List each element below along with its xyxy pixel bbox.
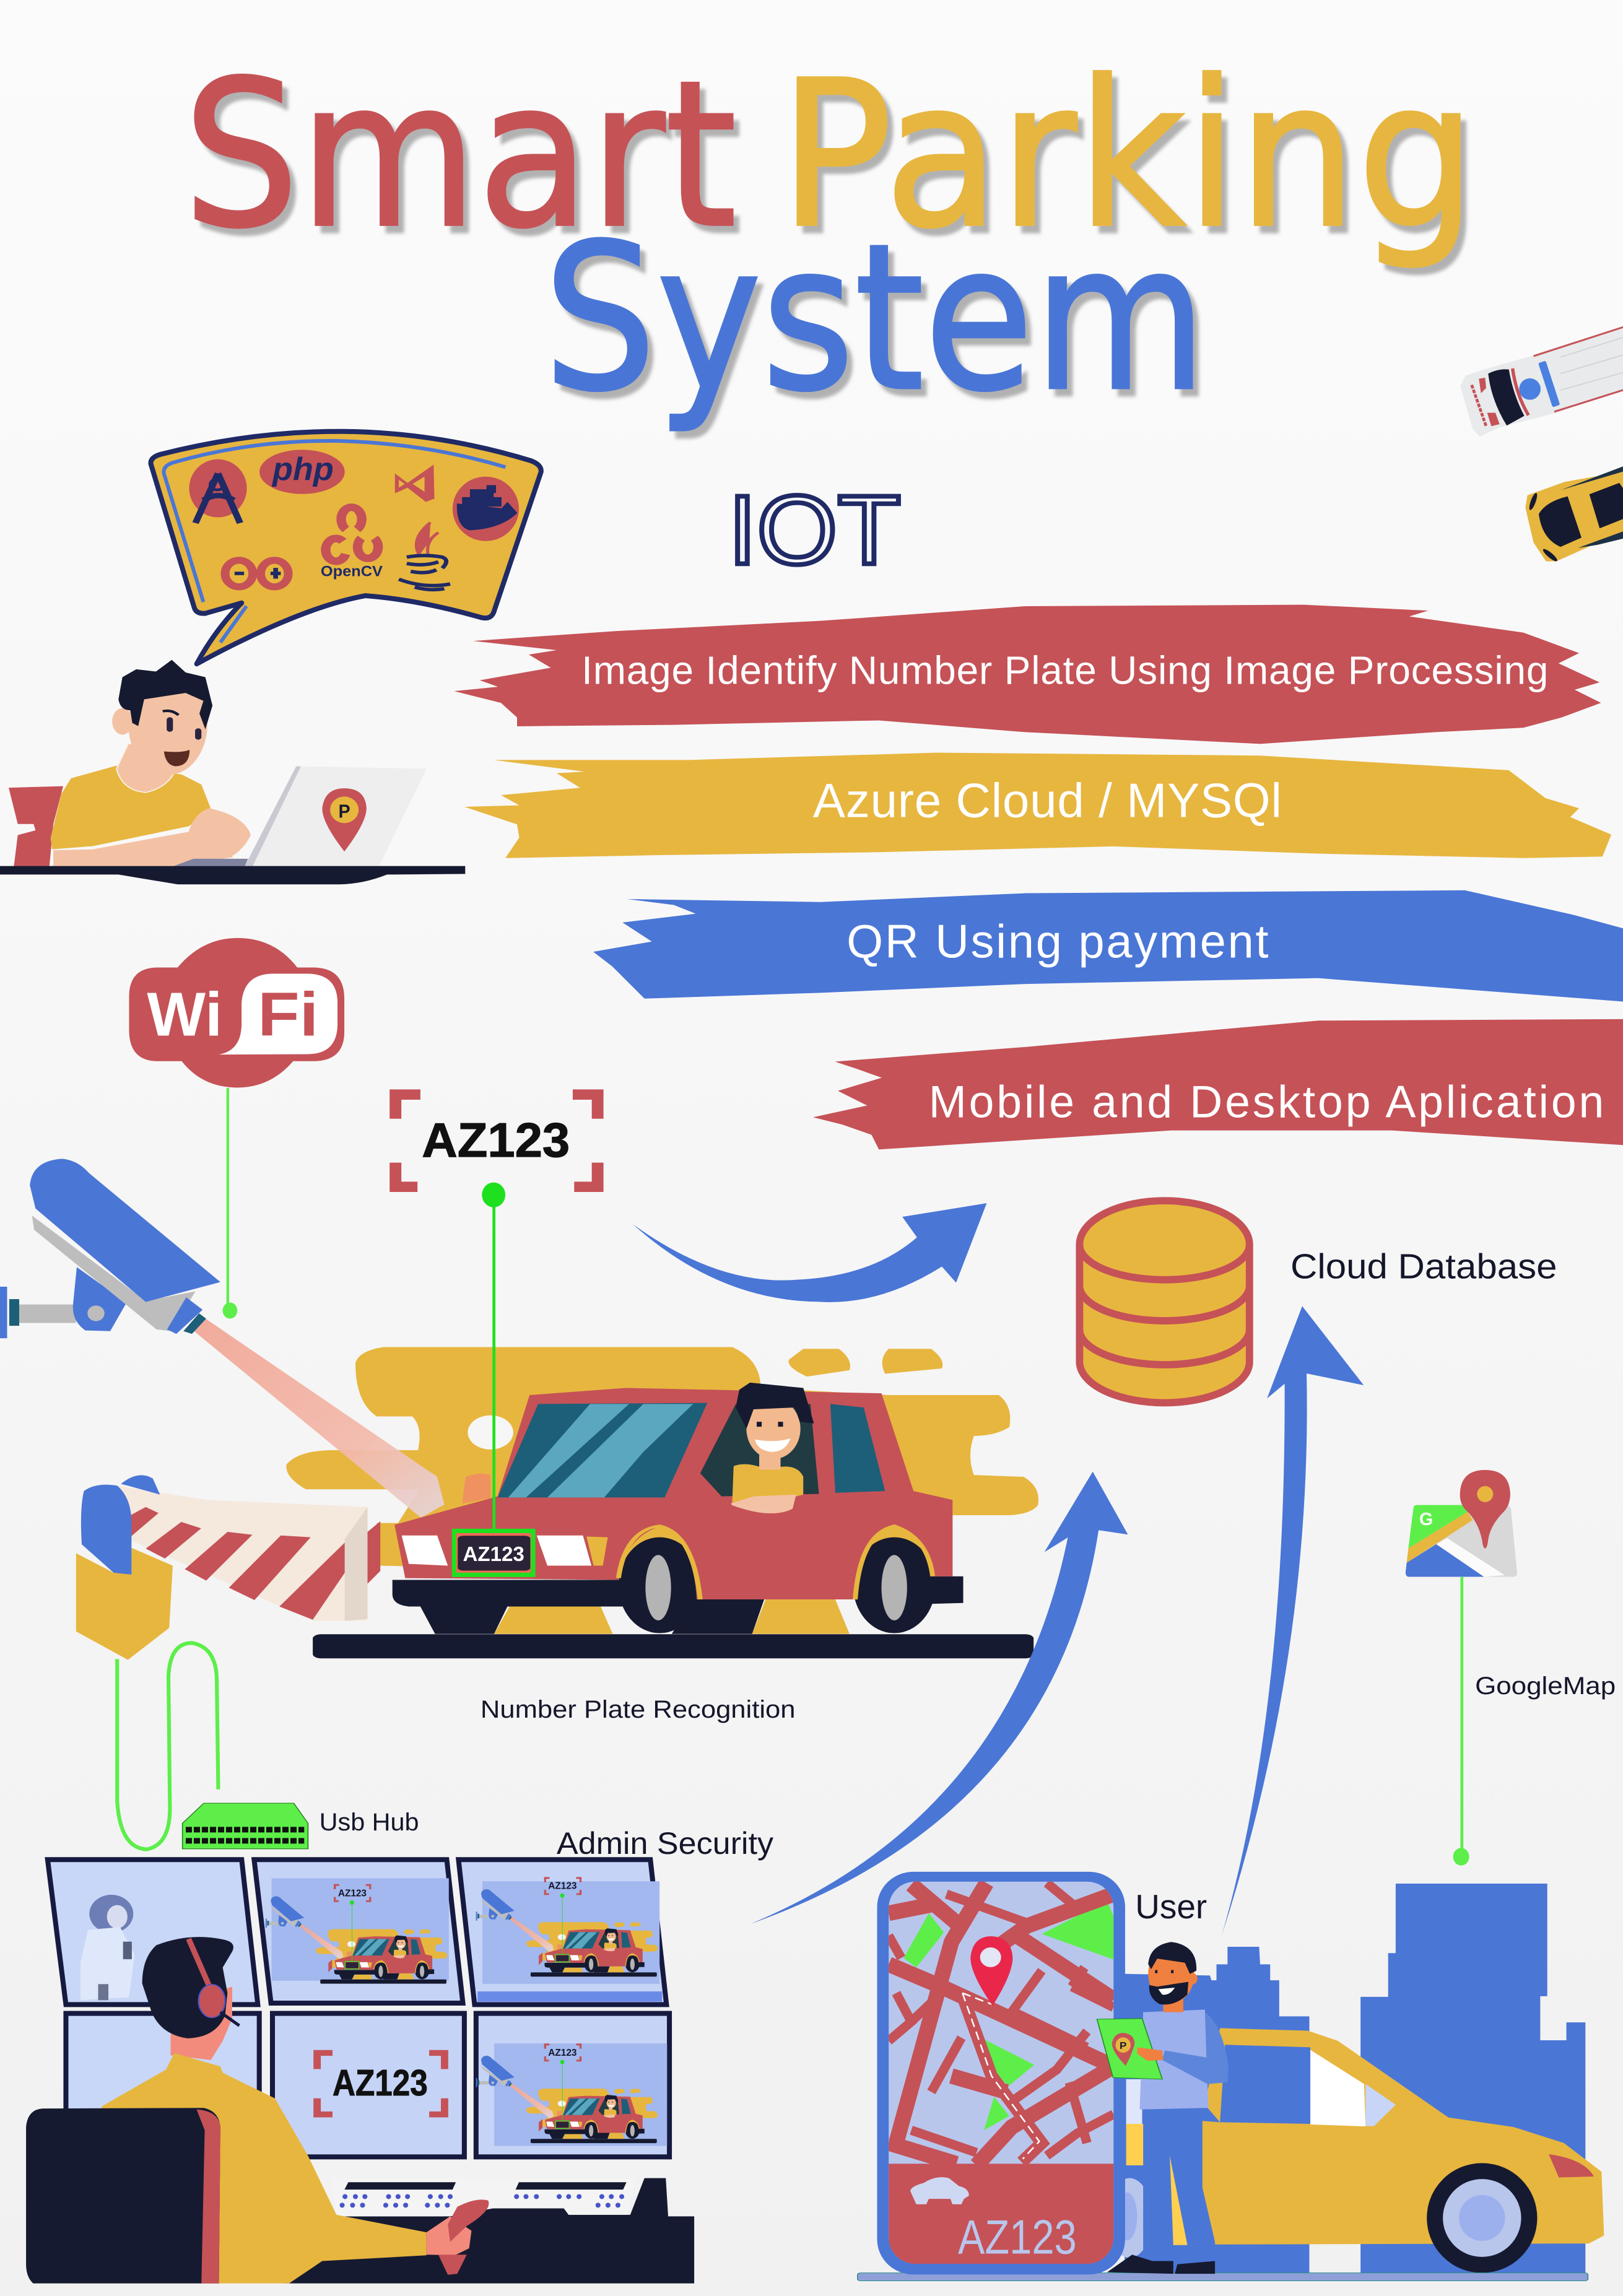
WiFi badge <box>129 938 344 1087</box>
developer hand <box>188 808 251 856</box>
icon: visual studio <box>395 464 435 502</box>
joystick base <box>438 2255 467 2275</box>
tablet pin: P <box>1120 2041 1126 2051</box>
developer hair <box>118 660 212 729</box>
chair side strip <box>197 2110 220 2284</box>
user smile <box>1158 1988 1175 1994</box>
windshield <box>498 1403 707 1497</box>
brush label: applications: Mobile and Desktop Aplication <box>929 1076 1604 1127</box>
icon: yellow taxi top view <box>1525 466 1623 563</box>
rear wheel arch <box>855 1526 933 1599</box>
driver <box>731 1383 814 1513</box>
security operator and console <box>26 1937 694 2284</box>
monitor: car feed top middle <box>254 1859 463 2003</box>
brush stroke: image processing <box>454 605 1601 744</box>
yellow road <box>1407 1512 1473 1563</box>
connector: map to city <box>1453 1577 1469 1866</box>
yellow blob dots <box>788 1349 942 1376</box>
yellow background blob <box>286 1347 1038 1576</box>
Fi panel <box>219 974 337 1055</box>
bubble inner highlight <box>163 441 505 643</box>
camera underside <box>32 1215 196 1331</box>
parking pin on laptop <box>322 788 367 851</box>
car back panel <box>1126 2079 1142 2124</box>
G letter: G <box>1419 1510 1433 1529</box>
phone plate text: AZ123 <box>958 2209 1077 2264</box>
user face <box>1148 1944 1194 2003</box>
camera wall mount <box>0 1287 7 1338</box>
desk <box>0 866 465 884</box>
front wheel arch <box>619 1526 700 1599</box>
console display left <box>344 2182 456 2189</box>
rear wheel <box>853 1537 936 1633</box>
barrier end shade <box>345 1507 368 1620</box>
bracket frame <box>389 1089 604 1192</box>
mini plate text large: AZ123 <box>548 1881 577 1892</box>
user ear <box>1187 1973 1198 1985</box>
tablet pin <box>1112 2033 1134 2066</box>
right headlight <box>537 1536 591 1566</box>
speech bubble shape <box>151 432 541 664</box>
mini scene <box>476 1877 658 1976</box>
developer torso <box>51 765 211 850</box>
hub ports lower <box>186 1838 304 1843</box>
icon: java <box>399 523 450 589</box>
icon: arduino <box>225 560 289 587</box>
chair <box>9 786 63 867</box>
icon: android studio <box>189 459 247 523</box>
yellow car <box>1200 2028 1604 2245</box>
headset mic <box>220 2012 239 2025</box>
connector: WiFi to camera <box>223 1088 237 1318</box>
big plate text: AZ123 <box>422 1113 570 1167</box>
arrow: admin to database <box>750 1472 1128 1924</box>
user eyes <box>1156 1970 1172 1973</box>
green sector <box>1408 1505 1468 1549</box>
plate backing <box>453 1530 534 1576</box>
left headlight <box>402 1536 448 1566</box>
blue sector <box>1406 1544 1484 1577</box>
car undercarriage <box>419 1599 764 1634</box>
monitor: car feed top right <box>458 1859 666 2004</box>
developer eyebrow <box>163 711 178 715</box>
monitor: plate readout <box>272 2014 464 2157</box>
title word: System: System <box>544 201 1207 436</box>
camera mount plate <box>9 1299 19 1326</box>
number plate <box>458 1536 530 1571</box>
driver neck <box>759 1452 780 1470</box>
ground bar <box>313 1634 1033 1658</box>
headset band <box>189 1939 211 1990</box>
headlight side <box>586 1536 608 1566</box>
camera lens ring <box>183 1313 206 1334</box>
car icon on phone <box>910 2177 969 2204</box>
destination pin <box>970 1936 1012 2006</box>
title word: Smart: Smart <box>183 37 737 272</box>
user torso <box>1139 2010 1209 2110</box>
label: cloud database: Cloud Database <box>1290 1247 1557 1286</box>
city, car and phone frame <box>858 1872 1604 2281</box>
arrow: plate to database <box>633 1203 986 1302</box>
barrier post <box>76 1548 173 1660</box>
lower stripe <box>477 1991 662 2002</box>
laptop keyboard <box>174 859 248 866</box>
operator shirt <box>71 2053 427 2284</box>
camera lens <box>167 1297 202 1334</box>
car side window light <box>1365 2084 1396 2126</box>
title <box>183 37 1476 436</box>
icon: WiFi logo <box>129 938 344 1087</box>
usb hub <box>183 1803 308 1849</box>
laptop hinge edge <box>245 766 301 866</box>
developer arm <box>53 832 233 866</box>
label: GoogleMap: GoogleMap <box>1475 1672 1616 1700</box>
barrier arm <box>117 1485 366 1620</box>
city building left <box>1125 1947 1309 2273</box>
hub top <box>183 1803 308 1849</box>
mini scene <box>266 1884 447 1984</box>
parking pin on laptop: P <box>339 801 350 822</box>
barrier hinge <box>121 1475 160 1495</box>
rear window <box>830 1404 885 1493</box>
developer eyes <box>170 720 198 737</box>
icon: ambulance top view <box>1460 327 1623 437</box>
user trouser gap <box>1170 2156 1187 2245</box>
car side window blue <box>1220 2045 1310 2124</box>
barrier stripes <box>129 1507 345 1620</box>
phone info panel <box>889 2163 1115 2266</box>
user beard <box>1149 1982 1188 2004</box>
icon: google maps <box>1406 1470 1517 1577</box>
monitor: car feed lower right <box>476 2014 669 2157</box>
green locator frame <box>454 1531 533 1575</box>
IOT outlined label: IOT <box>728 475 901 585</box>
route dashes <box>962 1993 1039 2159</box>
readout brackets <box>313 2050 448 2117</box>
developer face <box>128 674 207 775</box>
user arm <box>1162 2012 1229 2084</box>
driver mouth <box>755 1438 791 1452</box>
parking barrier <box>76 1475 368 1660</box>
developer neck and collar <box>116 744 189 793</box>
icon: docker <box>453 477 519 541</box>
driver hair <box>736 1383 814 1429</box>
woman hair <box>89 1895 133 1933</box>
headset ear cup <box>199 1985 225 2017</box>
woman face <box>107 1905 128 1928</box>
brush label: cloud: Azure Cloud / MYSQl <box>813 773 1282 828</box>
user with tablet <box>1097 1942 1229 2274</box>
car front wheel <box>1427 2163 1538 2273</box>
operator neck <box>170 1986 232 2060</box>
icon: OpenCV logo and label: OpenCV <box>321 562 383 580</box>
title word: Parking: Parking <box>779 37 1476 272</box>
user legs <box>1143 2107 1215 2262</box>
camera bracket hole <box>87 1305 105 1321</box>
operator hand <box>427 2216 471 2255</box>
rear bumper <box>924 1576 964 1604</box>
brush stroke: QR payment <box>593 890 1623 1002</box>
Fi text: Fi <box>258 980 318 1049</box>
woman coat <box>80 1927 135 2000</box>
barrier motor cap <box>81 1485 131 1575</box>
green locator dot <box>482 1183 505 1207</box>
speech bubble with technology icons <box>151 432 541 664</box>
phone map screen <box>888 1882 1115 2266</box>
green locator line <box>492 1195 495 1532</box>
feed panel <box>482 1881 659 1984</box>
woman trousers <box>98 1984 108 2000</box>
car plate text: AZ123 <box>463 1543 524 1566</box>
camera bracket <box>73 1267 126 1331</box>
blob gap <box>468 1415 513 1450</box>
user shoes <box>1107 2255 1215 2274</box>
map pin centre <box>1477 1486 1493 1502</box>
map major roads <box>889 1883 1113 2165</box>
chair back <box>26 2108 220 2284</box>
developer ear <box>112 708 133 734</box>
map green areas <box>903 1900 1113 2130</box>
brush stroke: cloud <box>464 753 1611 858</box>
number plate recognition scene <box>0 1089 1038 1658</box>
developer at desk with laptop <box>0 660 465 884</box>
label: usb hub: Usb Hub <box>320 1808 419 1836</box>
mini plate text large: AZ123 <box>338 1888 367 1898</box>
map tile <box>1406 1505 1517 1577</box>
route <box>962 1993 1042 2162</box>
car side window white <box>1310 2050 1365 2126</box>
map pin <box>1460 1470 1510 1549</box>
car rear yellow <box>1126 2124 1150 2165</box>
laptop lid <box>245 766 427 866</box>
camera beam <box>191 1318 444 1518</box>
brush label: image processing: Image Identify Number Plate Using Image Processing <box>581 648 1548 692</box>
woman phone <box>123 1942 132 1959</box>
console display right <box>516 2182 627 2189</box>
map background <box>888 1882 1115 2265</box>
user neck <box>1164 1999 1183 2012</box>
windshield glare <box>508 1404 693 1497</box>
label: number plate recognition: Number Plate Recognition <box>481 1695 795 1723</box>
yellow under car <box>494 1599 850 1634</box>
icon: OpenCV logo and label <box>321 507 383 580</box>
guard hand <box>462 1474 490 1503</box>
icon: database <box>1079 1201 1250 1402</box>
driver shirt <box>732 1464 803 1503</box>
car body <box>394 1388 952 1599</box>
barrier end red <box>359 1521 380 1593</box>
label: user: User <box>1135 1888 1207 1926</box>
feed panel <box>272 1878 449 1981</box>
console light panel <box>332 2178 635 2216</box>
user hand <box>1137 2047 1164 2061</box>
driver face <box>746 1399 801 1459</box>
car rear wheel <box>1107 2178 1152 2258</box>
hub ports upper <box>186 1827 304 1832</box>
city building right <box>1360 1884 1585 2273</box>
camera arm <box>19 1305 76 1323</box>
monitor: woman feed <box>48 1859 258 2004</box>
phone frame <box>877 1872 1125 2274</box>
mini plate text large: AZ123 <box>548 2048 577 2058</box>
brush stroke: applications <box>813 1019 1623 1149</box>
developer mouth <box>164 750 189 766</box>
user hair <box>1148 1942 1196 1974</box>
car headlamp <box>1549 2154 1594 2178</box>
joystick top <box>448 2199 489 2242</box>
icon: php logo: php <box>271 451 334 487</box>
console buttons <box>342 2196 622 2205</box>
camera body <box>30 1159 220 1302</box>
driver window <box>700 1404 819 1497</box>
ground strip <box>858 2273 1588 2281</box>
white road <box>1437 1538 1505 1577</box>
readout text: AZ123 <box>333 2062 428 2103</box>
driver arms <box>731 1495 796 1513</box>
arrow: user to database <box>1222 1306 1364 1936</box>
operator hair <box>142 1937 233 2038</box>
usb cable <box>117 1643 218 1850</box>
brush label: QR payment: QR Using payment <box>846 916 1269 968</box>
icon: php logo <box>259 450 345 494</box>
map minor roads <box>889 1883 1113 2156</box>
monitor: lower left <box>66 2014 259 2160</box>
front wheel <box>619 1537 701 1633</box>
Wi text: Wi <box>147 980 222 1049</box>
mini scene <box>476 2043 658 2143</box>
label: admin security: Admin Security <box>557 1826 773 1861</box>
front bumper <box>393 1580 629 1607</box>
feed panel <box>494 2043 667 2146</box>
console desk <box>284 2178 694 2284</box>
driver eyes <box>759 1422 780 1427</box>
tablet <box>1097 2019 1162 2079</box>
